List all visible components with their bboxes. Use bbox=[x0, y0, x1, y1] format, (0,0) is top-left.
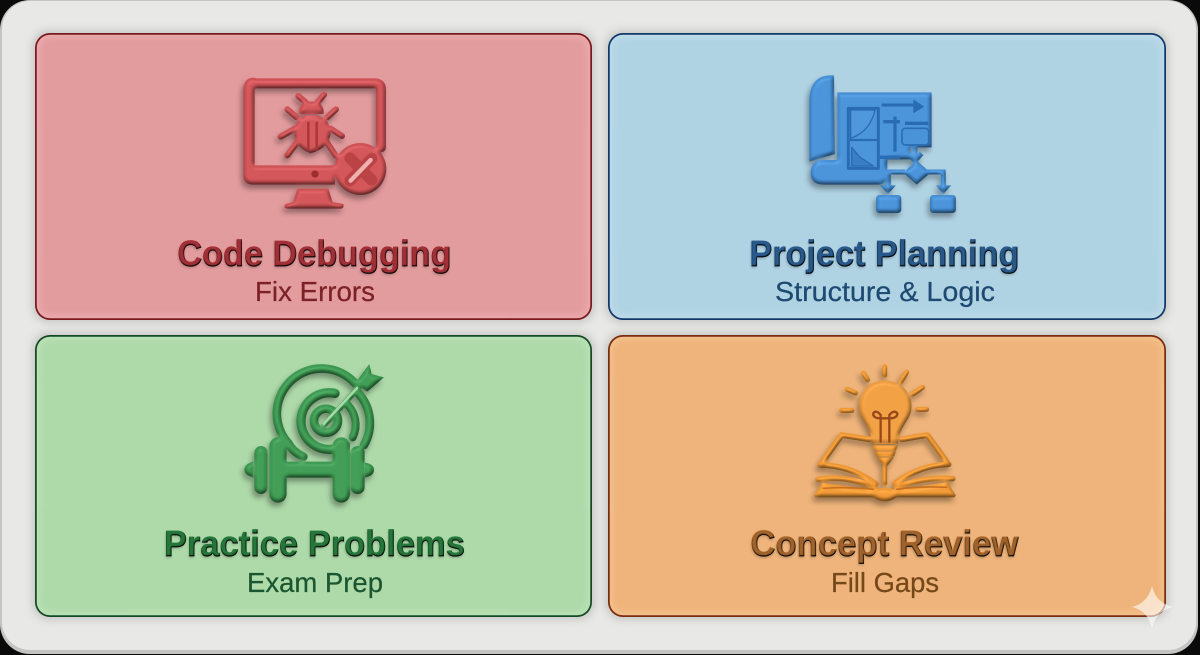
green panel background bbox=[35, 335, 592, 617]
heading: Concept Review: Concept Review bbox=[750, 523, 1019, 564]
subheading: Exam Prep: Exam Prep bbox=[247, 567, 383, 598]
icon detail: arrow shaft highlight bbox=[324, 388, 357, 424]
panel: practice problems bbox=[35, 335, 592, 617]
icon: target, arrow and dumbbell bbox=[244, 364, 384, 503]
orange panel background bbox=[608, 335, 1166, 617]
icon: sparkle watermark bbox=[1132, 586, 1173, 628]
subheading: Structure & Logic: Structure & Logic bbox=[775, 276, 995, 307]
panel: project planning bbox=[608, 33, 1166, 320]
subheading: Fix Errors: Fix Errors bbox=[255, 276, 375, 307]
icon: light bulb over open book bbox=[814, 367, 956, 501]
icon: blueprint and flowchart bbox=[809, 75, 956, 213]
panel: concept review bbox=[608, 335, 1166, 617]
icon detail: bulb filament bbox=[823, 412, 947, 489]
heading: Practice Problems: Practice Problems bbox=[164, 523, 465, 564]
red panel background bbox=[35, 33, 592, 320]
blue panel background bbox=[608, 33, 1166, 320]
subheading: Fill Gaps: Fill Gaps bbox=[831, 567, 939, 598]
icon detail: blueprint grooves bbox=[848, 100, 929, 168]
heading: Project Planning: Project Planning bbox=[750, 233, 1020, 274]
heading: Code Debugging: Code Debugging bbox=[178, 233, 452, 274]
icon: monitor with bug and error badge bbox=[243, 83, 386, 209]
panel: code debugging bbox=[35, 33, 592, 320]
icon detail: monitor button and cross bbox=[308, 122, 372, 181]
